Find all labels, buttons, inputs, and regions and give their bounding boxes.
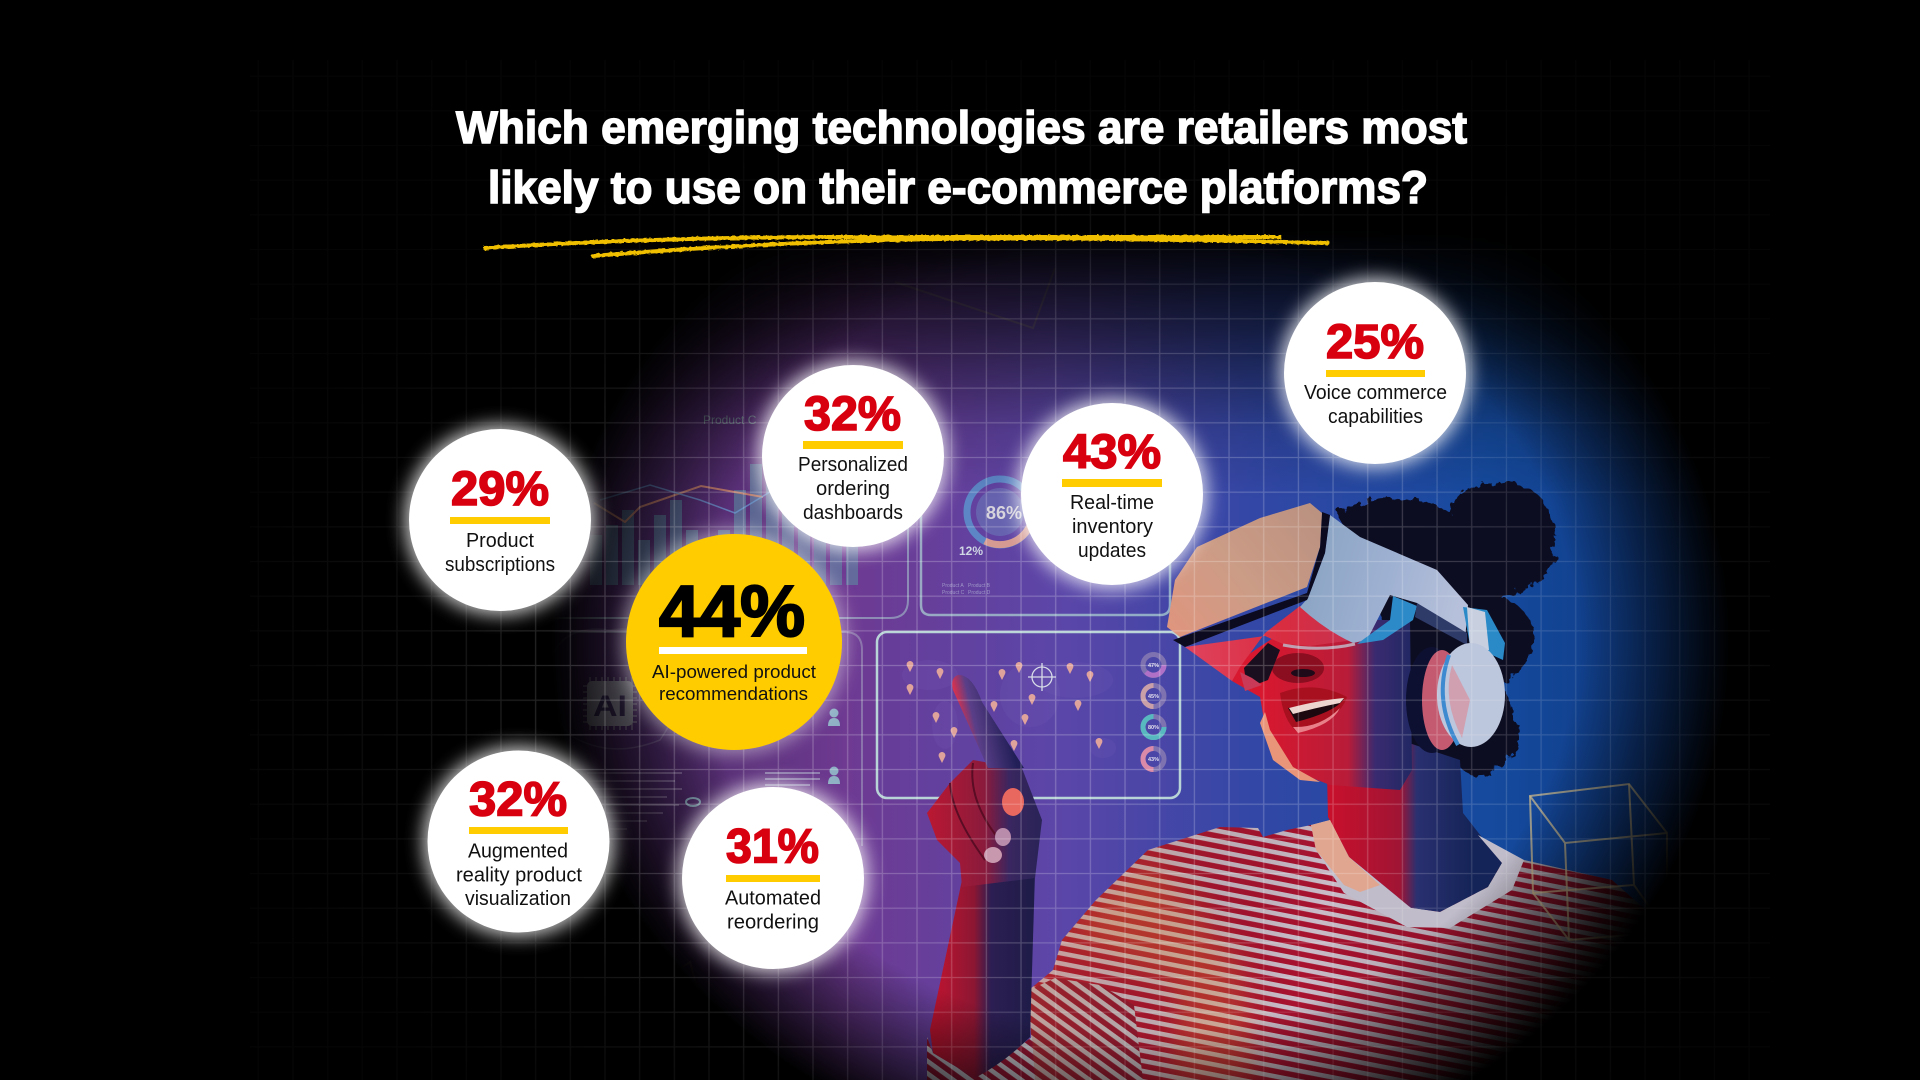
stat bubble: 29% product subscriptions <box>405 425 595 615</box>
stat bubble: 44% AI-powered product recommendations: recommendations <box>659 683 808 704</box>
grid overlay <box>250 60 1770 1080</box>
panel: donut dashboard: Product D <box>968 590 991 596</box>
person: collar warm tint <box>1311 820 1380 892</box>
icon: crosshair <box>1028 663 1056 691</box>
stat bubble: 31% automated reordering <box>678 783 868 973</box>
sleeve folds with steeper stripes <box>1029 978 1143 1080</box>
icon: user 1 <box>828 708 840 726</box>
stat bubble: 43% real-time inventory updates <box>1017 399 1207 589</box>
wireframe: cube <box>1530 784 1667 940</box>
wireframe: top line <box>922 292 1044 329</box>
title: Which emerging technologies are retailers most <box>456 102 1467 153</box>
icon: AI chip: AI <box>593 690 627 723</box>
goggle shadow <box>1244 643 1280 688</box>
panel: donut dashboard: 12% <box>959 544 983 558</box>
stat bubble: 25% voice commerce capabilities: 25% <box>1326 316 1424 369</box>
person: VR headset <box>1167 503 1468 681</box>
panel: donut dashboard: Product C <box>942 590 965 596</box>
person: arm and hand <box>927 675 1042 1078</box>
panel: donut dashboard <box>920 476 1172 616</box>
person: collar <box>1311 820 1524 928</box>
stat bubble: 31% automated reordering: Automated <box>725 888 821 910</box>
stat bubble: 31% automated reordering: 31% <box>726 820 819 874</box>
panel: world map dashboard <box>877 632 1180 798</box>
icon: user 2 <box>828 766 840 784</box>
thin frame <box>1283 644 1355 648</box>
person: shirt <box>1029 825 1680 1080</box>
stat bubble: 32% personalized ordering dashboards: dashboards <box>803 502 903 524</box>
mouth <box>1280 687 1347 732</box>
scene: photo backdrop with person and holographic dashboards <box>559 242 1720 1080</box>
top fade <box>661 116 1630 480</box>
stat bubble: 43% real-time inventory updates: updates <box>1078 540 1146 562</box>
icon: progress rings: 43% <box>1148 757 1159 763</box>
person: face <box>1232 620 1412 790</box>
stat bubble: 32% augmented reality product visualization <box>424 746 614 936</box>
stat bubble: 32% personalized ordering dashboards: 32% <box>804 388 901 441</box>
stat bubble: 29% product subscriptions: 29% <box>451 463 549 516</box>
icon: progress rings <box>1143 654 1164 770</box>
stat bubble: 44% AI-powered product recommendations: AI-powered product <box>652 661 816 682</box>
icon: AI chip <box>583 677 637 730</box>
stat bubble: 43% real-time inventory updates: inventory <box>1072 516 1153 538</box>
stat bubble: 43% real-time inventory updates: Real-time <box>1070 492 1154 514</box>
stat bubble: 29% product subscriptions: Product <box>466 530 534 552</box>
title <box>456 102 1467 213</box>
stat bubble: 32% augmented reality product visualization: 32% <box>469 774 567 826</box>
person: headphones <box>1406 607 1505 753</box>
stat bubble: 31% automated reordering: reordering <box>727 912 819 934</box>
icon: progress rings: 47% <box>1148 663 1159 669</box>
icon: progress rings: 45% <box>1148 694 1159 700</box>
panel: bar and line chart dashboard <box>564 416 909 619</box>
colour wash backdrop <box>566 242 1720 1080</box>
stat bubble: 25% voice commerce capabilities <box>1280 278 1470 468</box>
title underline brush stroke <box>485 236 1328 256</box>
stat bubble: 32% augmented reality product visualization: Augmented <box>468 840 568 862</box>
stat bubble: 43% real-time inventory updates: 43% <box>1063 426 1161 479</box>
stat bubble: 44% AI-powered product recommendations: 44% <box>659 572 805 652</box>
strap <box>1415 603 1467 645</box>
stat bubble: 32% augmented reality product visualization: visualization <box>465 888 571 910</box>
panel: donut dashboard: 86% <box>986 503 1022 523</box>
panel: donut dashboard: Product B <box>968 583 991 589</box>
stat bubble: 32% augmented reality product visualization: reality product <box>456 864 582 886</box>
teal lens piece <box>1357 596 1417 644</box>
person: chin ear cup <box>1260 712 1320 782</box>
person: neck <box>1327 740 1502 912</box>
stat bubble: 25% voice commerce capabilities: capabilities <box>1328 406 1423 428</box>
shell body <box>1300 515 1468 643</box>
stat bubble: 25% voice commerce capabilities: Voice commerce <box>1304 382 1447 404</box>
person: sleeve under arm <box>927 1037 1035 1080</box>
red lower visor <box>1185 606 1353 681</box>
panel: bar and line chart dashboard: Product C <box>703 413 757 427</box>
panel: donut dashboard: Product A <box>942 583 964 589</box>
wireframe: bottom-left line <box>615 962 722 1080</box>
stat bubble: 44% AI-powered product recommendations <box>622 530 846 754</box>
nose <box>1272 653 1324 683</box>
stat bubble: 29% product subscriptions: subscriptions <box>445 554 555 576</box>
black band <box>1173 512 1330 647</box>
stat bubble: 32% personalized ordering dashboards: Personalized <box>798 454 908 476</box>
peach visor <box>1167 503 1322 637</box>
person: hair <box>1337 483 1555 777</box>
stat bubble: 32% personalized ordering dashboards: ordering <box>816 478 890 500</box>
stat bubble: 32% personalized ordering dashboards <box>758 361 948 551</box>
icon: progress rings: 80% <box>1148 725 1159 731</box>
panel: AI brain dashboard <box>537 629 862 846</box>
title: likely to use on their e-commerce platforms? <box>488 162 1428 213</box>
